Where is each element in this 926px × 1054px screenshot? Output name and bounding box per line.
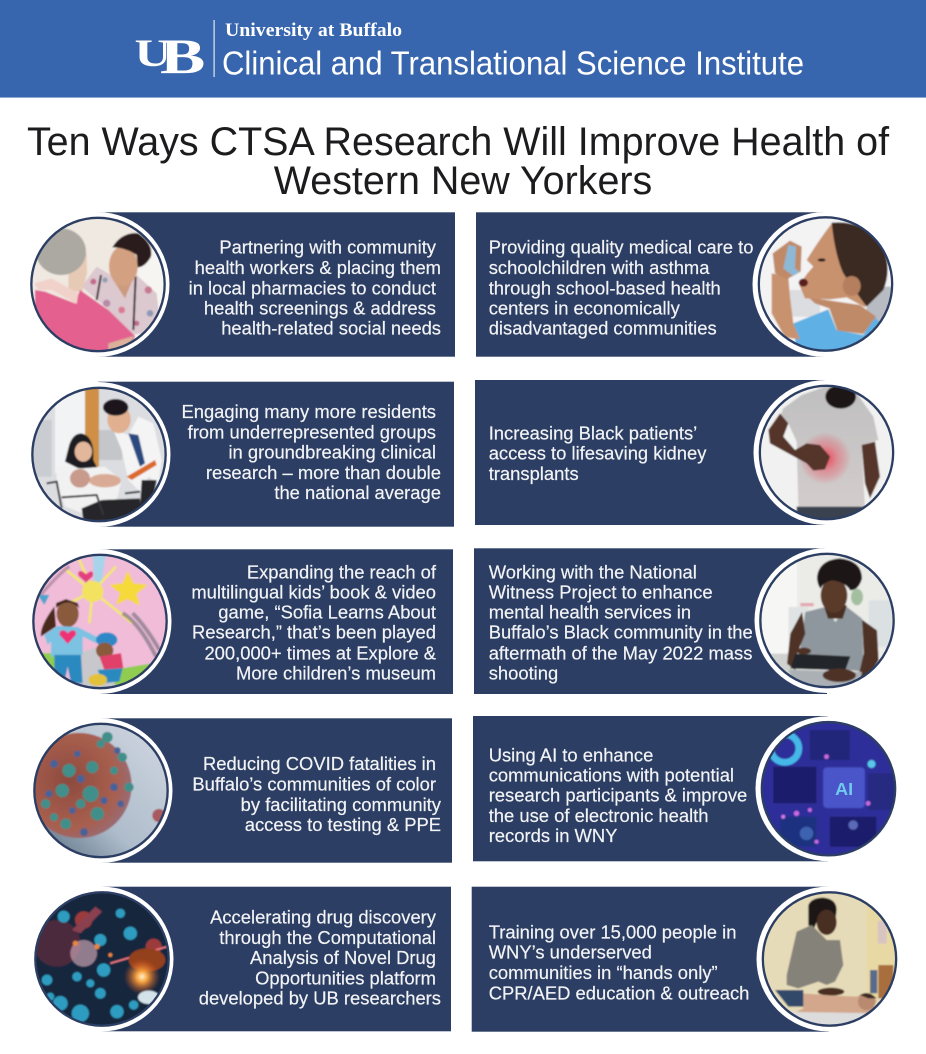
panel text: from underrepresented groups <box>188 421 436 442</box>
panel text: centers in economically <box>489 298 681 318</box>
panel text: Opportunities platform <box>255 967 436 988</box>
panel text: in groundbreaking clinical <box>228 442 436 463</box>
UB logo: U <box>134 32 171 75</box>
panel text: Reducing COVID fatalities in <box>203 753 436 774</box>
panel text <box>489 921 749 1003</box>
illustration: Sofia cartoon <box>29 552 173 693</box>
panel text: Buffalo’s Black community in the <box>489 622 753 643</box>
header banner <box>0 0 926 98</box>
panel text <box>181 401 441 503</box>
panel text <box>191 561 437 683</box>
panel text: multilingual kids’ book & video <box>191 582 436 603</box>
panel text: Research,” that’s been played <box>192 622 436 643</box>
title: Ten Ways CTSA Research Will Improve Health of <box>27 120 890 164</box>
panel: CPR training <box>472 885 905 1032</box>
panel text: communications with potential <box>489 764 734 785</box>
panel text <box>189 236 441 339</box>
panel text <box>489 422 707 484</box>
panel: underrepresented groups <box>25 380 454 527</box>
panel text: through school-based health <box>489 277 721 298</box>
photo: boy with inhaler <box>758 216 894 352</box>
panel: mental health services <box>474 547 902 694</box>
panel text: health screenings & address <box>204 298 436 318</box>
panel text: developed by UB researchers <box>199 987 441 1008</box>
photo: doctor with mother and baby <box>31 386 167 522</box>
photo: woman with tablet <box>759 552 895 688</box>
panel text: Providing quality medical care to <box>489 236 753 258</box>
institute name: Clinical and Translational Science Institute <box>222 44 804 82</box>
panel text: health workers & placing them <box>195 257 441 278</box>
panel text: disadvantaged communities <box>489 318 717 339</box>
university name: University at Buffalo <box>225 21 402 41</box>
panel text: research – more than double <box>206 462 441 483</box>
photo: coronavirus <box>33 722 169 858</box>
panel text: the use of electronic health <box>489 805 709 826</box>
panel text: Witness Project to enhance <box>489 582 713 603</box>
panel: drug discovery <box>28 886 451 1032</box>
photo: man holding side <box>758 384 894 520</box>
panel text: More children’s museum <box>236 662 436 683</box>
panel text: communities in “hands only” <box>489 962 718 983</box>
UB logo: B <box>160 29 205 84</box>
panel text: CPR/AED education & outreach <box>489 982 749 1003</box>
panel text: Using AI to enhance <box>489 744 653 765</box>
panel text: access to lifesaving kidney <box>489 442 707 464</box>
panel text: shooting <box>489 662 558 683</box>
panel text: Training over 15,000 people in <box>489 921 736 942</box>
panel text: through the Computational <box>219 927 436 948</box>
panel text: 200,000+ times at Explore & <box>204 642 436 663</box>
panel text: transplants <box>489 463 579 484</box>
panel text <box>489 744 747 846</box>
panel text: WNY’s underserved <box>489 942 652 963</box>
panel text <box>489 236 753 339</box>
panel text: access to testing & PPE <box>245 814 441 835</box>
panel: community health workers <box>24 210 455 363</box>
panel text: game, “Sofia Learns About <box>218 602 436 623</box>
logo divider <box>214 20 215 77</box>
AI label: AI <box>835 779 853 799</box>
panel text: Increasing Black patients’ <box>489 422 697 444</box>
panel text: mental health services in <box>489 602 691 623</box>
panel text: Engaging many more residents <box>181 401 436 422</box>
panel text: Accelerating drug discovery <box>210 907 437 928</box>
panel text: Expanding the reach of <box>247 561 437 582</box>
panel text <box>199 907 441 1008</box>
panel text: Working with the National <box>489 561 697 582</box>
title: Western New Yorkers <box>274 159 652 203</box>
title <box>27 120 890 203</box>
panel: AI communications <box>473 716 900 861</box>
panel text <box>489 561 753 683</box>
panel text: schoolchildren with asthma <box>489 257 710 278</box>
photo: patient and nurse <box>30 216 166 352</box>
panel text: the national average <box>274 482 441 503</box>
panel text: Analysis of Novel Drug <box>250 947 436 968</box>
UB logo <box>134 29 205 84</box>
panel: kids book and video game <box>26 549 453 694</box>
panel text <box>192 753 442 835</box>
panel: kidney transplants <box>475 380 900 527</box>
panel text: records in WNY <box>489 825 617 846</box>
panel text: Buffalo’s communities of color <box>192 773 436 794</box>
panel: COVID fatalities <box>26 718 452 863</box>
panel text: by facilitating community <box>241 794 442 815</box>
panel: asthma care <box>476 210 900 357</box>
photo: CPR instruction <box>762 891 898 1027</box>
panel text: health-related social needs <box>221 318 441 339</box>
panel text: research participants & improve <box>489 785 747 806</box>
panel text: aftermath of the May 2022 mass <box>489 642 752 663</box>
photo: molecules and capsules <box>32 888 172 1028</box>
panel text: Partnering with community <box>219 236 437 258</box>
illustration: AI chip <box>757 717 900 860</box>
panel text: in local pharmacies to conduct <box>189 277 436 298</box>
